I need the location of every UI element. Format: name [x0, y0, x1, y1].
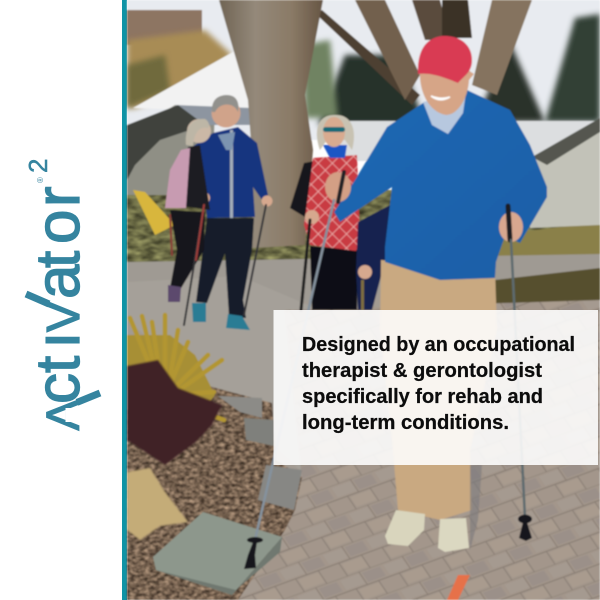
teal divider strip: [122, 0, 127, 600]
orange ground marking: [447, 575, 470, 600]
stone shadow side: [156, 537, 282, 595]
hidden walker with small pole: [356, 205, 390, 310]
main man shadow on paving: [470, 465, 482, 550]
main man red cap: [418, 36, 472, 83]
main man shoes: [385, 510, 469, 552]
yellow chairs: [133, 190, 175, 235]
logo: Activator 2: [23, 159, 100, 430]
trekking poles in background: [170, 205, 310, 325]
logo: Activator 2: t: [24, 251, 93, 268]
left greenhouse blue-grey cover: [175, 105, 255, 125]
man in blue jacket: [185, 95, 272, 330]
dried leaves: [127, 468, 188, 540]
main man left pole: [244, 172, 344, 569]
plant: dark red foliage: [127, 360, 222, 465]
footpath: [127, 254, 600, 302]
plant: yellow grass: [127, 315, 224, 420]
logo: Activator 2: 2: [23, 159, 53, 173]
caption text: long-term conditions.: [302, 412, 509, 434]
photograph: group walking with poles: [127, 0, 600, 600]
large foreground stone: [153, 512, 282, 595]
logo: Activator 2: a: [24, 264, 93, 299]
sky: [127, 0, 600, 140]
logo: Activator 2: i: [24, 333, 93, 347]
logo: Activator 2: t: [24, 356, 93, 373]
logo: Activator 2: o: [24, 210, 93, 244]
rear white tent band: [340, 121, 600, 161]
edging stones: [218, 396, 302, 510]
woman in red vest: [290, 115, 360, 310]
main man trousers: [380, 260, 497, 520]
background building and autumn trees: [127, 10, 232, 108]
main man right hand: [499, 212, 523, 242]
logo: Activator 2: c: [24, 373, 93, 404]
main man smile: [431, 96, 450, 100]
right greenhouse dark arch: [532, 118, 600, 165]
left white logo panel: [0, 0, 122, 600]
left greenhouse: [127, 105, 215, 195]
main man left hand: [325, 172, 351, 202]
woman in pink top and black vest: [165, 119, 211, 302]
grass: [127, 190, 600, 265]
caption text: Designed by an occupational: [302, 334, 575, 356]
grass right: [495, 222, 600, 270]
tree trunk: [219, 0, 323, 248]
lawn far right: [490, 268, 600, 310]
logo: Activator 2: r: [24, 186, 93, 207]
main man sweater: [334, 90, 547, 280]
logo: Activator 2: ®: [36, 177, 45, 183]
paving upper: [127, 276, 320, 470]
caption card: [274, 310, 598, 465]
ground underlay: [127, 260, 600, 600]
main man head: [420, 66, 474, 115]
main man right pole: [508, 206, 532, 541]
main man shirt collar: [423, 92, 466, 134]
paving main: [238, 300, 600, 600]
logo: Activator 2: A: [37, 399, 89, 430]
caption text: specifically for rehab and: [302, 386, 543, 408]
left greenhouse dark arch: [127, 105, 205, 180]
mulch bed: [127, 385, 302, 600]
white tent roof: [133, 48, 252, 112]
caption text: [302, 334, 575, 434]
logo: Activator 2: V: [37, 301, 89, 332]
right greenhouse: [525, 125, 600, 228]
caption text: therapist & gerontologist: [302, 360, 542, 382]
evergreen trees and branches: [302, 0, 600, 125]
